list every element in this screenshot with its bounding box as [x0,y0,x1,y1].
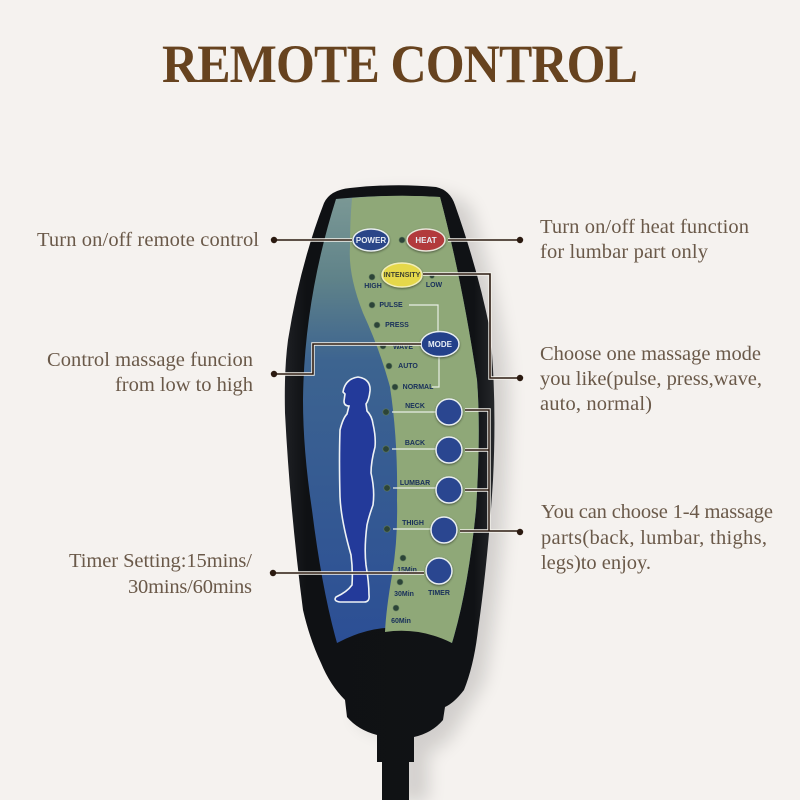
remote body [285,185,494,800]
panel labels: HIGH [364,283,382,290]
remote shadow [348,192,509,800]
panel labels: 15Min [397,567,417,574]
callout: timer: Timer Setting:15mins/ [69,550,252,572]
panel labels: PRESS [385,322,409,329]
button: neck [436,399,462,425]
button: heat [407,229,445,251]
button: back [436,437,462,463]
white panel lines [392,305,439,529]
button: intensity: INTENSITY [384,272,421,279]
callout: heat: for lumbar part only [540,241,709,263]
callout: massage parts: legs)to enjoy. [541,552,651,574]
panel labels: LUMBAR [400,480,430,487]
faceplate: green area [350,196,479,643]
panel labels: TIMER [428,590,450,597]
callout: massage parts: You can choose 1-4 massage [541,501,773,523]
button: mode: MODE [428,340,453,349]
button: power [353,229,389,251]
callout: power: Turn on/off remote control [37,229,259,251]
callout: mode: Choose one massage mode [540,343,761,365]
panel labels: THIGH [402,520,424,527]
faceplate: blue area [303,196,479,643]
button: thigh [431,517,457,543]
button: intensity [382,263,422,287]
panel labels: LOW [426,282,443,289]
callout: mode [423,274,762,415]
callout: massage parts: parts(back, lumbar, thighs, [541,527,767,549]
button: timer [426,558,452,584]
panel labels: NORMAL [403,384,434,391]
panel labels: NECK [405,403,425,410]
callout: timer: 30mins/60mins [128,576,252,598]
callout: timer [69,550,424,598]
button: lumbar [436,477,462,503]
callout: intensity: from low to high [115,374,253,396]
button: heat: HEAT [415,236,437,245]
title: REMOTE CONTROL [162,34,638,95]
button: power: POWER [356,236,386,245]
panel labels: PULSE [379,302,403,309]
panel labels: 30Min [394,591,414,598]
callout: intensity [47,344,421,396]
panel labels: BACK [405,440,425,447]
panel labels: WAVE [393,344,413,351]
callout: mode: auto, normal) [540,393,652,415]
LED indicators [369,237,434,611]
panel labels: 60Min [391,618,411,625]
callout: mode: you like(pulse, press,wave, [540,368,762,390]
callout: intensity: Control massage funcion [47,349,253,371]
button: mode [421,332,459,356]
panel labels: AUTO [398,363,418,370]
panel labels [364,282,450,625]
callout line halos [273,240,520,573]
remote control device [285,185,509,800]
callout: heat [448,216,749,263]
human body figure [335,377,375,602]
callout: heat: Turn on/off heat function [540,216,749,238]
callout: massage parts [460,410,773,574]
